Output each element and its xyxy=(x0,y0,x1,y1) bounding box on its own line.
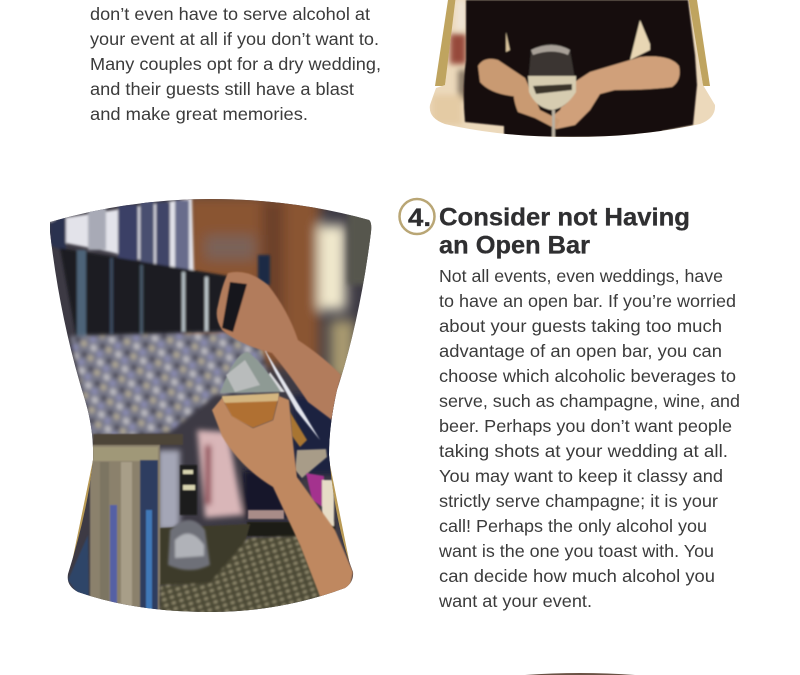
text block: dry wedding paragraph: and make great memories. xyxy=(90,104,308,124)
photo: woman holding wine glass xyxy=(430,0,715,137)
text block: open bar paragraph: beer. Perhaps you don’t want people xyxy=(439,416,732,436)
text block: open bar paragraph: can decide how much alcohol you xyxy=(439,566,715,586)
number badge: 4: 4. xyxy=(408,204,431,232)
heading: consider not having an open bar: an Open Bar xyxy=(439,232,590,260)
text block: open bar paragraph: advantage of an open bar, you can xyxy=(439,341,722,361)
text block: open bar paragraph: choose which alcoholic beverages to xyxy=(439,366,736,386)
text block: open bar paragraph: taking shots at your wedding at all. xyxy=(439,441,728,461)
text block: dry wedding paragraph: don’t even have to serve alcohol at xyxy=(90,4,370,24)
text block: open bar paragraph: call! Perhaps the only alcohol you xyxy=(439,516,707,536)
text block: open bar paragraph: want at your event. xyxy=(438,591,592,611)
text block: open bar paragraph xyxy=(438,266,740,611)
text block: open bar paragraph: serve, such as champagne, wine, and xyxy=(439,391,740,411)
text block: open bar paragraph: strictly serve champagne; it is your xyxy=(439,491,718,511)
text block: dry wedding paragraph: and their guests still have a blast xyxy=(90,79,354,99)
photo: bartender pouring beer from taps xyxy=(40,190,380,620)
text block: open bar paragraph: Not all events, even weddings, have xyxy=(439,266,723,286)
text block: open bar paragraph: You may want to keep it classy and xyxy=(439,466,723,486)
text block: open bar paragraph: about your guests taking too much xyxy=(439,316,722,336)
photo: top edge of next image xyxy=(525,673,635,675)
text block: open bar paragraph: want is the one you toast with. You xyxy=(438,541,714,561)
number badge: 4 xyxy=(400,199,434,234)
heading: consider not having an open bar xyxy=(439,204,690,260)
text block: open bar paragraph: to have an open bar. If you’re worried xyxy=(439,291,736,311)
text block: dry wedding paragraph: Many couples opt for a dry wedding, xyxy=(90,54,381,74)
text block: dry wedding paragraph: your event at all if you don’t want to. xyxy=(90,29,379,49)
heading: consider not having an open bar: Consider not Having xyxy=(439,204,690,232)
text block: dry wedding paragraph xyxy=(90,4,381,124)
